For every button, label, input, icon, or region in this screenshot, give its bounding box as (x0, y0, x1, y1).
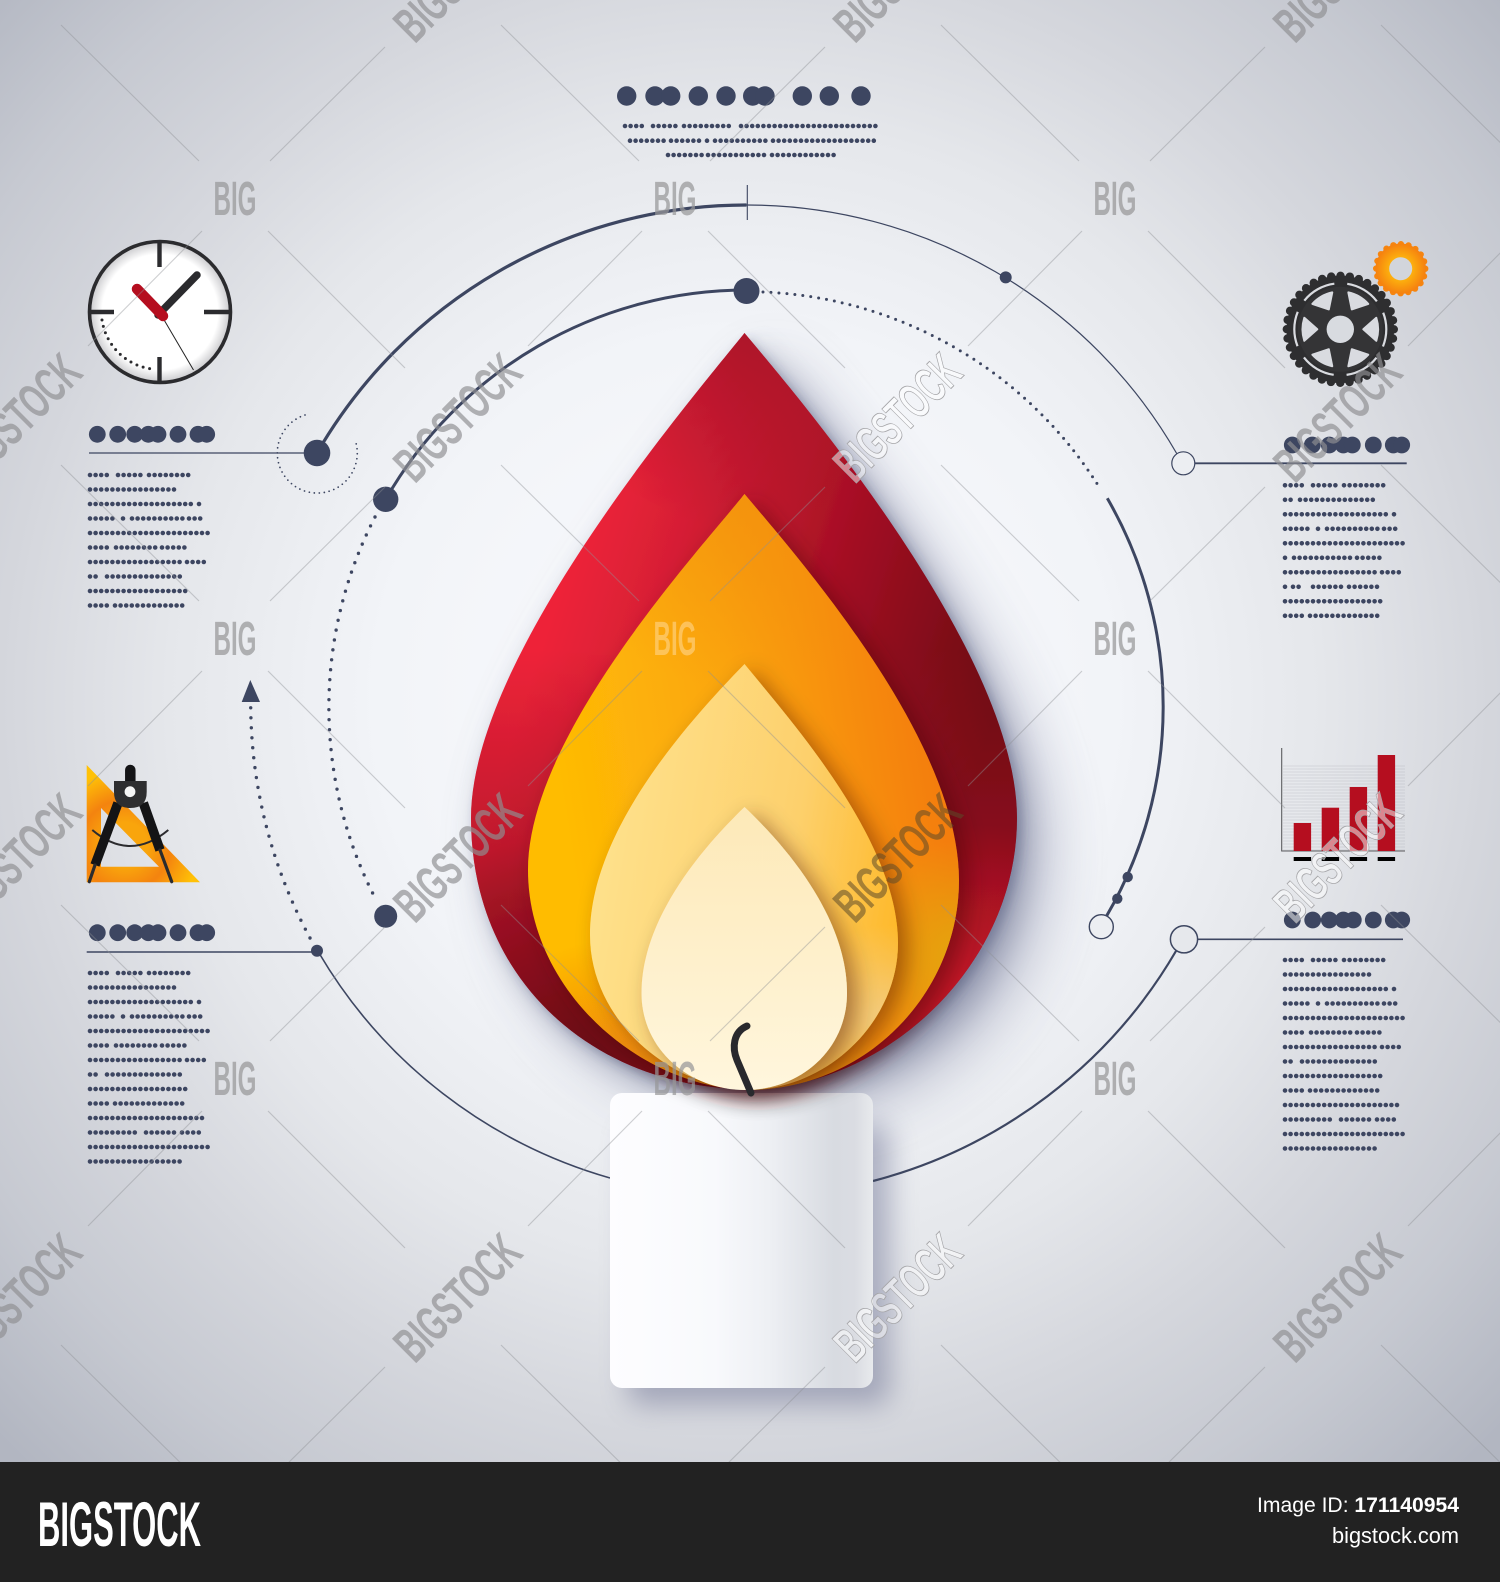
outer ring arcs (317, 185, 1177, 1181)
right bottom rule (1198, 938, 1403, 940)
top heading dots (617, 86, 871, 106)
panel: right top text (1195, 437, 1410, 616)
footer band (0, 1462, 1500, 1582)
watermark: BIG repeated: BIG (654, 173, 696, 226)
flame layer: cream (642, 807, 847, 1090)
chart bars (1294, 755, 1395, 851)
left top rule (89, 452, 305, 454)
flame layer: yellow (590, 664, 898, 1090)
icon: gears (1286, 244, 1426, 383)
icon: compass and set square (87, 765, 200, 882)
inner ring arcs (329, 290, 1163, 917)
nodes (277, 271, 1198, 957)
right bottom heading dots (1284, 912, 1410, 928)
panel: left top text (89, 426, 305, 606)
footer site: bigstock.com (1332, 1523, 1459, 1548)
flame (471, 333, 1017, 1090)
right top body dots (1285, 485, 1406, 616)
top heading block (617, 86, 880, 155)
watermark: BIG repeated: BIG (214, 173, 256, 226)
watermark: BIGSTOCK repeated: BIGSTOCK (383, 1223, 532, 1372)
flame and candle shadow (483, 345, 1047, 1405)
arrow: dotted arc with head (242, 680, 310, 938)
watermark: BIGSTOCK repeated: BIGSTOCK (823, 783, 972, 932)
icon: clock (90, 242, 230, 383)
watermark: BIG repeated (214, 173, 1136, 1106)
left bottom heading dots (89, 924, 215, 941)
top body dots (625, 126, 880, 155)
right top heading dots (1284, 437, 1410, 453)
watermark: BIGSTOCK repeated: BIGSTOCK (383, 783, 532, 932)
watermark: BIG repeated: BIG (214, 613, 256, 666)
left top heading dots (89, 426, 215, 443)
right bottom body dots (1285, 960, 1406, 1148)
panel: left bottom text (87, 924, 312, 1162)
watermark: BIGSTOCK repeated: BIGSTOCK (1263, 1223, 1412, 1372)
left bottom rule (87, 951, 312, 953)
footer image id: Image ID: 171140954 (1257, 1494, 1459, 1517)
watermark: BIG repeated: BIG (654, 613, 696, 666)
watermark: BIG repeated: BIG (214, 1053, 256, 1106)
left top body dots (90, 475, 211, 606)
chart labels (1294, 857, 1395, 861)
watermark: BIG repeated: BIG (1094, 173, 1136, 226)
left bottom body dots (90, 973, 211, 1162)
watermark: BIGSTOCK repeated: BIGSTOCK (823, 1223, 972, 1372)
watermark: BIG repeated: BIG (1094, 1053, 1136, 1106)
flame layer: orange (528, 494, 959, 1090)
watermark: BIG repeated: BIG (654, 1053, 696, 1106)
flame layer: outer red (471, 333, 1017, 1089)
bar chart (1282, 748, 1405, 861)
watermark: BIGSTOCK repeated: BIGSTOCK (1263, 783, 1412, 932)
candle body (610, 1093, 873, 1388)
right top rule (1195, 462, 1407, 464)
footer band: BIGSTOCK (38, 1490, 201, 1560)
icon: orange gear (1376, 244, 1426, 294)
icon: dark gear (1286, 276, 1394, 383)
watermark: BIG repeated: BIG (1094, 613, 1136, 666)
watermark: BIGSTOCK repeated: BIGSTOCK (823, 343, 972, 492)
watermark: BIGSTOCK repeated: BIGSTOCK (1263, 343, 1412, 492)
wick (734, 1026, 751, 1093)
watermark: BIGSTOCK repeated: BIGSTOCK (383, 343, 532, 492)
panel: right bottom text (1198, 912, 1410, 1148)
